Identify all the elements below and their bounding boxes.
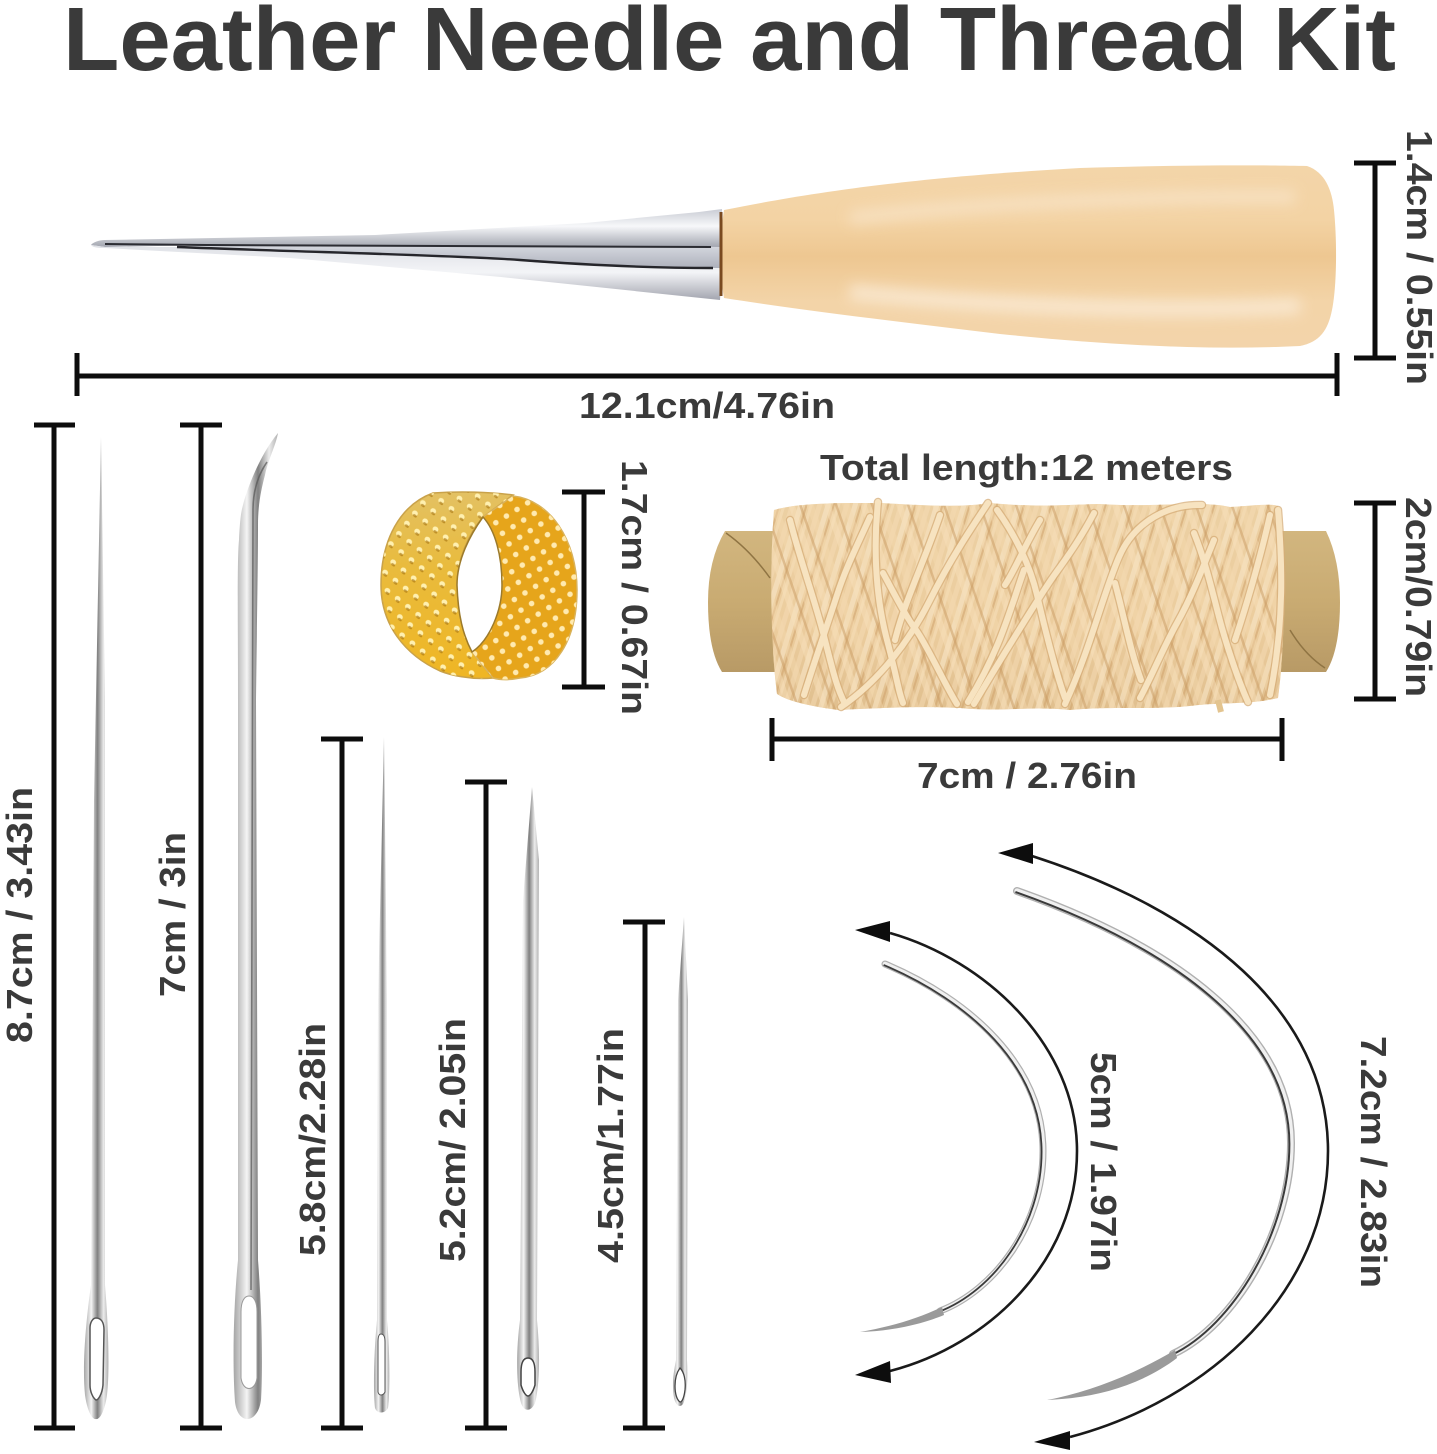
spool cardboard tube right bbox=[1280, 531, 1340, 672]
label: needle 4: 5.2cm/ 2.05in bbox=[432, 1018, 473, 1262]
label: needle 3: 5.8cm/2.28in bbox=[292, 1023, 333, 1256]
dimension: thimble bbox=[562, 492, 605, 687]
dimension: awl height bbox=[1354, 163, 1396, 358]
arrow: small curved needle bbox=[855, 921, 1077, 1383]
label: thread total length: Total length:12 meters bbox=[820, 447, 1233, 488]
dimension: awl length bbox=[77, 353, 1337, 396]
dimension: needle 5 bbox=[623, 922, 665, 1428]
spool cardboard tube left bbox=[708, 531, 780, 672]
label: needle 2: 7cm / 3in bbox=[152, 832, 193, 997]
thimble opening bbox=[457, 517, 502, 652]
icon: large curved needle bbox=[1015, 891, 1291, 1400]
icon: needle 3 bbox=[374, 737, 389, 1412]
label: spool width: 7cm / 2.76in bbox=[917, 755, 1137, 796]
arrow: large curved needle bbox=[998, 843, 1328, 1450]
icon: needle 5 bbox=[673, 917, 688, 1406]
awl steel blade bbox=[91, 209, 722, 247]
dimension: needle 1 bbox=[34, 425, 75, 1428]
thread winding bbox=[771, 503, 1284, 710]
icon: thimble bbox=[381, 492, 577, 680]
awl tool bbox=[91, 165, 1336, 348]
label: needle 5: 4.5cm/1.77in bbox=[590, 1028, 631, 1263]
awl wooden handle bbox=[720, 165, 1336, 348]
icon: needle 4 bbox=[517, 787, 539, 1410]
dimension: needle 2 bbox=[180, 425, 222, 1428]
icon: thread spool bbox=[708, 502, 1340, 712]
icon: small curved needle bbox=[860, 964, 1043, 1332]
icon: needle 2 curved tip bbox=[234, 433, 278, 1419]
label: thimble: 1.7cm / 0.67in bbox=[614, 460, 655, 715]
label: small curved needle: 5cm / 1.97in bbox=[1083, 1052, 1124, 1272]
dimension: spool height bbox=[1354, 503, 1396, 699]
label: large curved needle: 7.2cm / 2.83in bbox=[1353, 1036, 1394, 1288]
dimension: needle 3 bbox=[321, 739, 363, 1428]
icon: needle 1 bbox=[84, 437, 108, 1419]
dimension: needle 4 bbox=[465, 782, 507, 1428]
label: needle 1: 8.7cm / 3.43in bbox=[0, 787, 40, 1043]
thimble outer band bbox=[381, 492, 513, 678]
label: awl length: 12.1cm/4.76in bbox=[579, 385, 835, 426]
thimble interior bbox=[472, 496, 577, 680]
dimension: spool width bbox=[772, 718, 1282, 761]
